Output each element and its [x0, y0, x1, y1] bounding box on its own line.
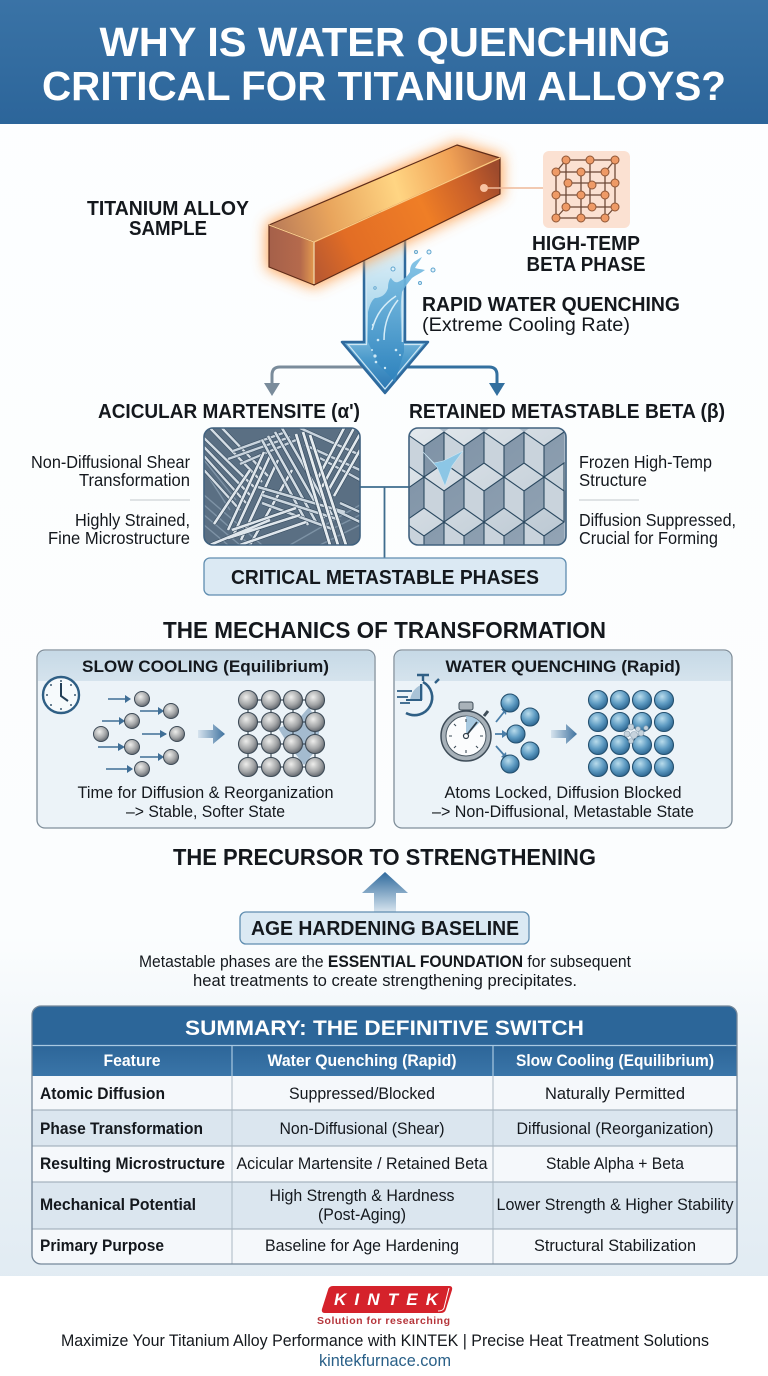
arrow	[551, 724, 577, 744]
row: primary purpose	[40, 1236, 696, 1255]
callout: age hardening baseline: AGE HARDENING BASELINE	[251, 918, 519, 940]
label: titanium alloy sample: TITANIUM ALLOY	[87, 197, 249, 220]
footer url: kintekfurnace.com	[319, 1352, 451, 1370]
arrow: rapid water quenching	[342, 240, 435, 393]
panel title: WATER QUENCHING (Rapid)	[446, 657, 680, 676]
table header: Water Quenching (Rapid)	[268, 1052, 456, 1070]
connector lines to critical phases box	[360, 487, 409, 558]
row: atomic diffusion: Atomic Diffusion	[40, 1084, 165, 1103]
panel caption: –> Non-Diffusional, Metastable State	[432, 803, 694, 821]
diagram: atoms diffusing	[94, 692, 184, 776]
diagram: ordered lattice	[238, 690, 324, 776]
row: primary purpose: Baseline for Age Hardening	[265, 1236, 459, 1255]
logo: KINTEK	[317, 1286, 452, 1327]
titanium alloy bar	[269, 145, 500, 285]
panel: slow cooling	[37, 650, 375, 828]
panel caption: Time for Diffusion & Reorganization	[78, 784, 334, 802]
callout: critical metastable phases	[204, 558, 566, 595]
label: rapid water quenching: RAPID WATER QUENCHING	[422, 293, 680, 316]
text: martensite notes: Highly Strained,	[75, 510, 190, 530]
text: beta notes: Diffusion Suppressed,	[579, 510, 736, 530]
row: atomic diffusion	[40, 1084, 685, 1103]
row: resulting microstructure: Acicular Martensite / Retained Beta	[236, 1154, 488, 1173]
table title: SUMMARY: THE DEFINITIVE SWITCH	[185, 1016, 584, 1040]
row: atomic diffusion: Suppressed/Blocked	[289, 1084, 435, 1103]
logo: KINTEK: Solution for researching	[317, 1315, 450, 1327]
table header: Slow Cooling (Equilibrium)	[516, 1052, 714, 1070]
label: rapid water quenching: (Extreme Cooling Rate)	[422, 314, 630, 336]
arrow: upward	[362, 872, 408, 912]
row: mechanical potential: (Post-Aging)	[318, 1205, 406, 1224]
panel caption: –> Stable, Softer State	[126, 803, 285, 821]
heading: acicular martensite: ACICULAR MARTENSITE (α')	[98, 400, 360, 423]
connector to lattice	[487, 187, 543, 189]
text: essential foundation note: Metastable phases are the ESSENTIAL FOUNDATION for subsequent	[139, 953, 631, 971]
label: titanium alloy sample	[87, 197, 249, 240]
row: primary purpose: Primary Purpose	[40, 1236, 164, 1255]
text: martensite notes: Non-Diffusional Shear	[31, 452, 190, 472]
text: beta notes: Structure	[579, 470, 647, 490]
title banner: WHY IS WATER QUENCHING	[100, 19, 670, 65]
label: high-temp beta phase: BETA PHASE	[526, 253, 646, 276]
label: high-temp beta phase: HIGH-TEMP	[532, 232, 640, 255]
heading: the precursor to strengthening: THE PRECURSOR TO STRENGTHENING	[173, 844, 596, 870]
panel title: SLOW COOLING (Equilibrium)	[82, 657, 329, 676]
callout: age hardening baseline	[240, 912, 529, 944]
arrow	[198, 724, 225, 744]
icon: stopwatch	[441, 702, 491, 761]
microstructure: acicular martensite needles	[204, 428, 360, 545]
panel caption: Atoms Locked, Diffusion Blocked	[444, 784, 682, 802]
row: mechanical potential: Lower Strength & Higher Stability	[496, 1195, 734, 1214]
panel caption	[78, 784, 334, 821]
label: titanium alloy sample: SAMPLE	[129, 217, 207, 240]
row: resulting microstructure: Resulting Microstructure	[40, 1154, 225, 1173]
row: phase transformation	[40, 1119, 714, 1138]
text: martensite notes: Transformation	[79, 470, 190, 490]
callout: critical metastable phases: CRITICAL METASTABLE PHASES	[231, 566, 539, 589]
row: mechanical potential	[40, 1186, 734, 1224]
row: resulting microstructure	[40, 1154, 685, 1173]
label: high-temp beta phase	[526, 232, 646, 276]
text: martensite notes: Fine Microstructure	[48, 528, 190, 548]
heading: retained metastable beta: RETAINED METASTABLE BETA (β)	[409, 400, 725, 423]
table header	[104, 1052, 714, 1070]
icon: fast stopwatch	[397, 675, 439, 715]
text: essential foundation note	[139, 953, 631, 990]
text: beta notes: Frozen High-Temp	[579, 452, 712, 472]
diagram: locked atoms	[495, 694, 539, 773]
heading: the mechanics of transformation: THE MECHANICS OF TRANSFORMATION	[163, 617, 606, 643]
branch arrows to the two phases	[264, 367, 505, 396]
water splash	[368, 250, 435, 382]
text: beta notes	[579, 452, 736, 548]
table header: Feature	[104, 1052, 160, 1070]
icon: clock	[43, 677, 79, 713]
row: resulting microstructure: Stable Alpha + Beta	[546, 1154, 685, 1173]
title banner: CRITICAL FOR TITANIUM ALLOYS?	[42, 63, 726, 109]
microstructure: retained beta hexagons	[408, 427, 567, 546]
footer call to action: Maximize Your Titanium Alloy Performance with KINTEK | Precise Heat Treatment Solutions	[61, 1332, 709, 1350]
panel: water quenching	[394, 650, 732, 828]
row: phase transformation: Non-Diffusional (Shear)	[280, 1119, 444, 1138]
footer background	[0, 1276, 768, 1376]
title banner	[0, 0, 768, 124]
row: phase transformation: Diffusional (Reorganization)	[516, 1119, 714, 1138]
row: mechanical potential: Mechanical Potential	[40, 1195, 196, 1214]
text: essential foundation note: heat treatments to create strengthening precipitates.	[193, 972, 577, 990]
diagram: metastable lattice	[588, 690, 674, 776]
icon: beta phase lattice	[543, 151, 630, 228]
row: phase transformation: Phase Transformation	[40, 1119, 203, 1138]
text: martensite notes	[31, 452, 190, 548]
summary table	[32, 1006, 737, 1264]
label: rapid water quenching	[422, 293, 680, 336]
row: atomic diffusion: Naturally Permitted	[545, 1084, 685, 1103]
row: primary purpose: Structural Stabilization	[534, 1236, 696, 1255]
logo: KINTEK: KINTEK	[334, 1290, 440, 1309]
text: beta notes: Crucial for Forming	[579, 528, 718, 548]
panel caption	[432, 784, 694, 821]
row: mechanical potential: High Strength & Hardness	[270, 1186, 454, 1205]
